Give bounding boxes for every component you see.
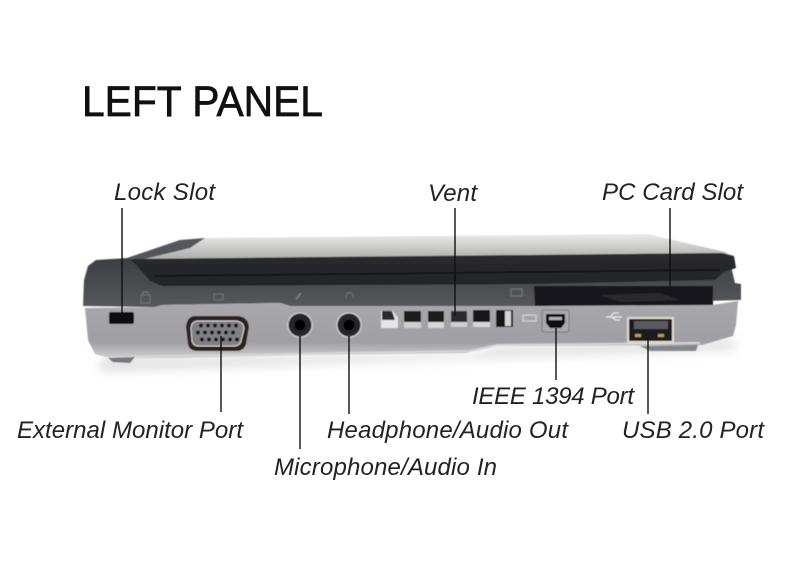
port icons bbox=[141, 292, 150, 303]
label: Microphone/Audio In: Microphone/Audio In bbox=[274, 454, 497, 481]
label: Headphone/Audio Out: Headphone/Audio Out bbox=[327, 417, 569, 444]
label: PC Card Slot: PC Card Slot bbox=[602, 179, 744, 206]
label: IEEE 1394 Port: IEEE 1394 Port bbox=[472, 383, 635, 410]
label: USB 2.0 Port: USB 2.0 Port bbox=[622, 417, 765, 444]
floor shadow bbox=[100, 340, 735, 372]
laptop photo bbox=[83, 234, 741, 372]
foot bbox=[108, 357, 135, 363]
microphone jack bbox=[287, 312, 313, 338]
laptop lid top bbox=[127, 234, 735, 262]
USB port bbox=[627, 317, 674, 343]
label: External Monitor Port: External Monitor Port bbox=[17, 417, 244, 444]
title: LEFT PANEL bbox=[82, 78, 323, 126]
1394 icon bbox=[523, 315, 536, 321]
laptop base dark band bbox=[83, 258, 741, 307]
PC card slot bbox=[534, 286, 713, 306]
laptop silver body bbox=[85, 301, 738, 358]
label: Vent: Vent bbox=[428, 180, 478, 207]
leader lines bbox=[122, 208, 670, 449]
headphone jack bbox=[336, 312, 362, 338]
external monitor port bbox=[186, 316, 249, 351]
vent bbox=[381, 310, 513, 328]
USB icon bbox=[606, 313, 622, 320]
laptop lid front bbox=[130, 253, 736, 286]
IEEE 1394 port bbox=[542, 310, 569, 332]
lock slot bbox=[109, 312, 134, 324]
label: Lock Slot: Lock Slot bbox=[114, 179, 216, 206]
